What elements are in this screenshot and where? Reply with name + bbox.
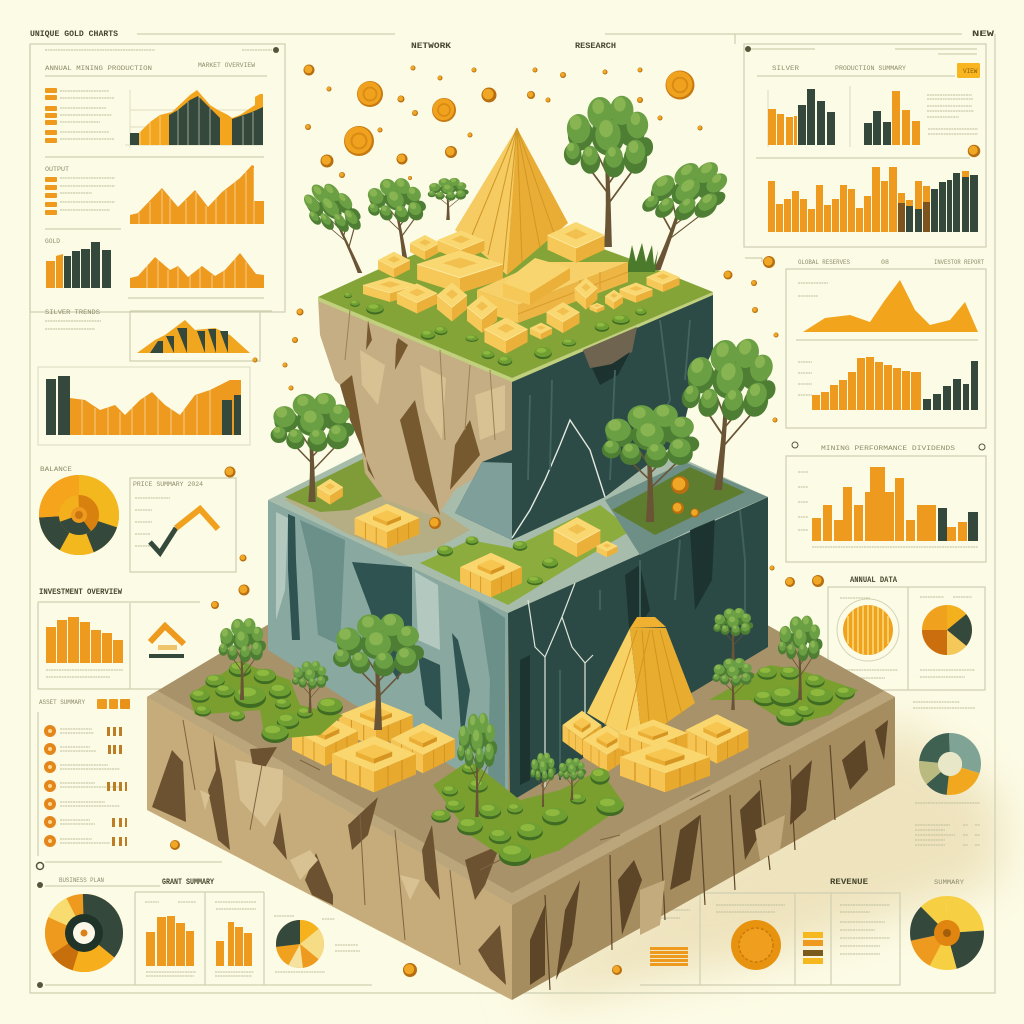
chart: mixed area 1 <box>125 90 263 148</box>
grass tuft <box>628 243 658 272</box>
right labels row: 08 <box>881 259 889 266</box>
donut chart right <box>913 702 980 845</box>
panel: right bars C: MINING PERFORMANCE DIVIDENDS <box>821 445 956 452</box>
list with round icons: ASSET SUMMARY <box>39 699 85 706</box>
panel: bottom right <box>640 878 964 985</box>
panel: left top charts: MARKET OVERVIEW <box>198 62 255 69</box>
panel: bars and arch: INVESTMENT OVERVIEW <box>39 588 122 597</box>
panel: bottom right: REVENUE <box>830 878 868 887</box>
base shadow <box>520 720 1000 1000</box>
panel: semi-circle and pie: ANNUAL DATA <box>850 576 897 585</box>
legend swatches 1 <box>45 88 57 215</box>
pie bottom right <box>928 914 966 952</box>
brown niche <box>583 327 637 368</box>
surface left section <box>285 458 470 556</box>
panel: wide area chart <box>38 367 250 445</box>
surface center section <box>420 505 632 605</box>
right labels row: INVESTOR REPORT <box>934 259 984 266</box>
list with round icons <box>38 699 130 856</box>
panel: left top charts: OUTPUT <box>45 166 69 173</box>
panel: trend line: BALANCE <box>40 466 72 473</box>
trees on top tier <box>295 96 739 273</box>
panel: right top charts <box>735 34 986 247</box>
chart: upper-left bars <box>768 89 835 145</box>
orange medallion <box>731 920 781 970</box>
white vein upper <box>512 420 605 538</box>
top tier <box>318 215 713 540</box>
right labels row: GLOBAL RESERVES <box>798 259 850 266</box>
panel: small chart <box>45 309 272 361</box>
panel: bottom bars and small pie <box>135 892 360 985</box>
gold bars top stack <box>363 222 680 354</box>
chart: upper-right bars <box>864 91 920 145</box>
small pie <box>276 920 324 968</box>
panel: right top charts: PRODUCTION SUMMARY <box>835 65 906 72</box>
bushes top surface <box>344 293 647 366</box>
chart: orange area 4 <box>130 253 264 288</box>
panel: left top charts <box>30 44 285 312</box>
top center labels <box>411 42 616 51</box>
bushes lower left <box>189 662 343 743</box>
panel: right top charts: SILVER <box>772 65 799 72</box>
bottom left dividers and labels: BUSINESS PLAN <box>59 877 104 884</box>
teal face dark regions <box>288 514 470 745</box>
bottom left dividers and labels <box>36 862 372 988</box>
surface right section <box>605 462 768 555</box>
left face cracks <box>152 733 506 985</box>
gold blocks mid tier <box>317 476 700 597</box>
panel: trend line: PRICE SUMMARY 2024 <box>133 481 203 488</box>
gold blocks lower <box>292 700 748 792</box>
chart: bars 3 <box>46 242 111 288</box>
bushes lower front <box>431 760 625 866</box>
yellow button <box>957 63 980 78</box>
stacked block <box>650 947 688 966</box>
base slab <box>147 480 895 1000</box>
chart: bars <box>812 357 978 410</box>
bushes lower right <box>709 665 858 726</box>
panel: bars and arch <box>38 588 200 689</box>
dark face detail <box>520 515 715 785</box>
white veins <box>528 583 593 787</box>
panel: trend line <box>40 466 236 572</box>
panel: right area and bars <box>786 269 986 428</box>
chart: area <box>803 280 978 332</box>
right face cracks <box>530 720 888 985</box>
trees lower <box>219 608 823 817</box>
gold pyramid top <box>455 128 568 275</box>
panel: bottom right: SUMMARY <box>934 879 964 886</box>
long lower bar stack <box>477 258 628 323</box>
stacked legend <box>803 932 823 964</box>
striped gauge <box>837 599 899 661</box>
yellow button: VIEW <box>963 68 978 75</box>
panel: right bars C <box>786 442 986 562</box>
bottom left dividers and labels: GRANT SUMMARY <box>162 878 214 887</box>
gold pyramid lower <box>587 617 695 740</box>
floating gold coins <box>170 64 778 977</box>
panel: small chart: SILVER TRENDS <box>45 309 100 316</box>
top center labels: NETWORK <box>411 42 451 51</box>
panel: left top charts: ANNUAL MINING PRODUCTION <box>45 65 152 72</box>
icon: pie chart left <box>39 475 119 555</box>
main title: UNIQUE GOLD CHARTS <box>30 30 118 39</box>
middle tier <box>268 380 768 802</box>
pie <box>922 605 972 655</box>
panel: semi-circle and pie <box>785 575 985 690</box>
top center labels: RESEARCH <box>575 42 616 51</box>
chart: wide bars <box>768 167 978 232</box>
chart: orange area 2 <box>130 165 264 224</box>
right labels row <box>735 30 994 268</box>
pie chart bottom left <box>45 894 123 972</box>
panel: left top charts: GOLD <box>45 238 60 245</box>
tan cliff cracks <box>340 320 480 515</box>
right labels row: NEW <box>972 30 994 39</box>
trees mid tier <box>271 339 781 522</box>
